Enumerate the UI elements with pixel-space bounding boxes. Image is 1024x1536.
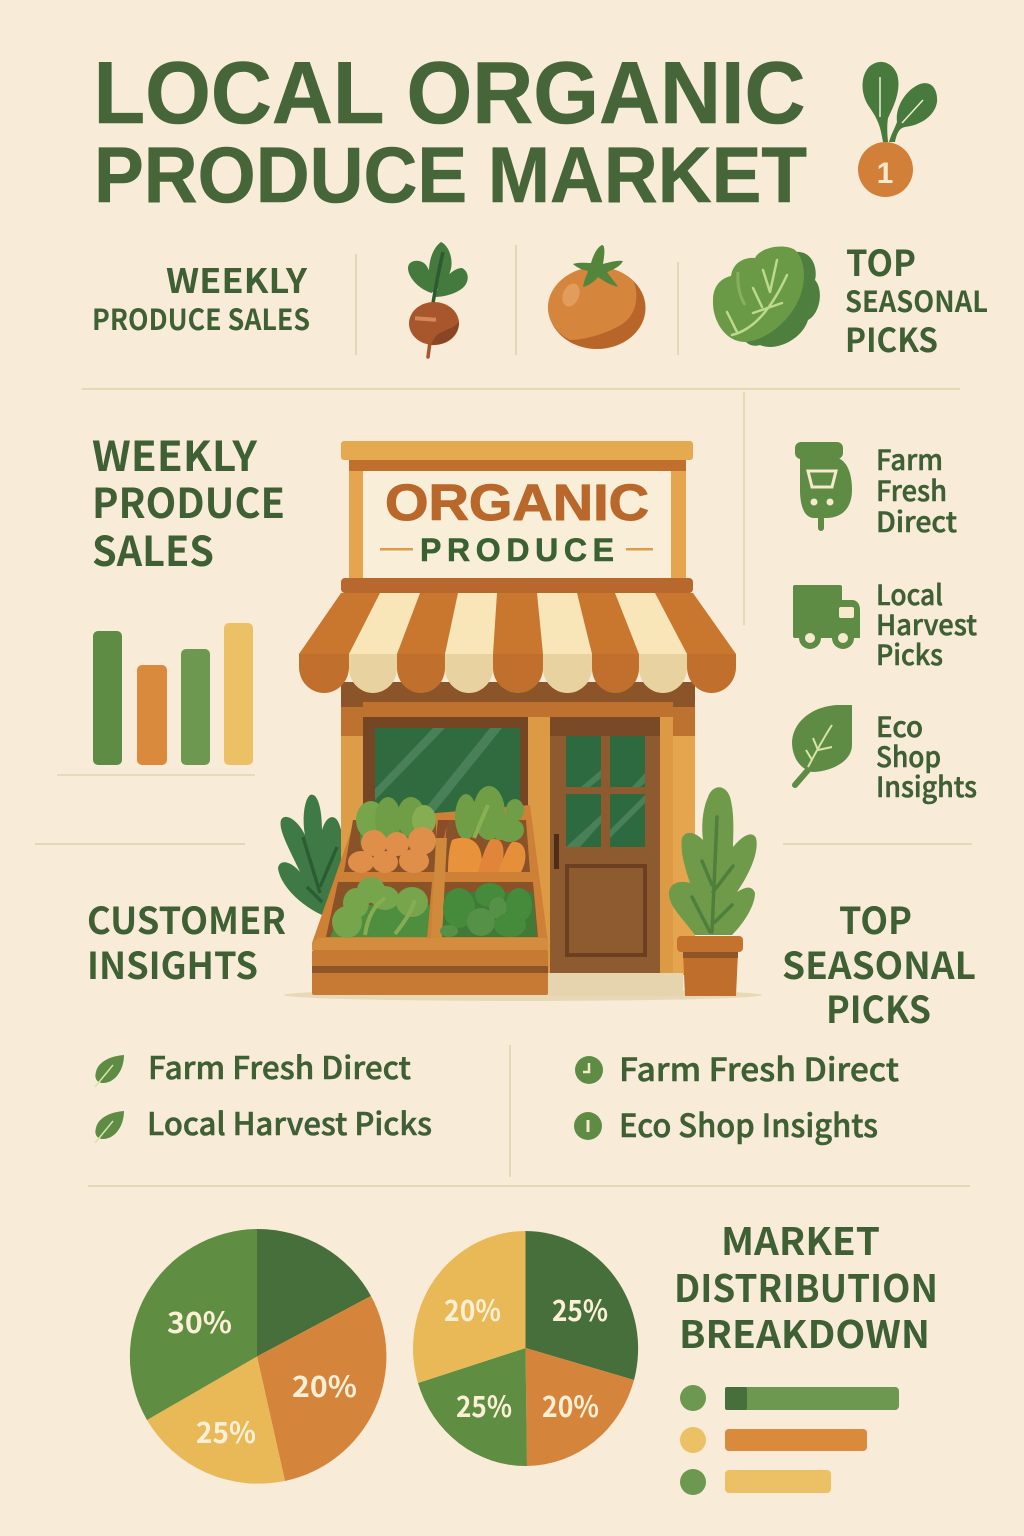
ground shadow [284, 989, 762, 1001]
list: top seasonal picks: Farm Fresh Direct [619, 1045, 899, 1091]
greens top right [455, 786, 524, 842]
floor [548, 973, 683, 996]
heading: weekly produce sales strip [92, 254, 310, 339]
text: eco shop insights: Insights [876, 766, 977, 806]
list: customer insights [95, 1043, 432, 1144]
bar chart: weekly sales [57, 623, 255, 776]
heading: weekly produce sales: WEEKLY [92, 423, 258, 483]
carrots [448, 838, 525, 872]
pie chart: large: 30% [167, 1300, 232, 1342]
heading: top seasonal picks strip: SEASONAL [845, 279, 988, 321]
text: eco shop insights: Eco [876, 706, 923, 746]
spinach bottom right [440, 883, 537, 937]
heading: top seasonal picks: TOP [839, 891, 912, 945]
heading: weekly produce sales strip: WEEKLY [166, 254, 307, 303]
pie chart: large: 25% [196, 1410, 256, 1452]
list: customer insights: Farm Fresh Direct [148, 1043, 411, 1088]
text: farm fresh direct: Direct [876, 501, 957, 541]
heading: weekly produce sales strip: PRODUCE SALES [92, 297, 310, 339]
icon: beet [408, 242, 468, 357]
list: top seasonal picks: Eco Shop Insights [619, 1101, 878, 1147]
lettuce top left [356, 797, 436, 844]
icon: tomato [548, 245, 646, 349]
title [94, 43, 807, 219]
left plant [278, 795, 345, 915]
icon: round bullet [575, 1056, 603, 1084]
heading: market distribution breakdown [674, 1211, 938, 1359]
text: farm fresh direct: Farm [876, 439, 943, 479]
shop sign: PRODUCE [420, 532, 614, 568]
pie chart: small: 25% [552, 1288, 608, 1330]
lettuce bottom left [330, 877, 430, 938]
produce crate [312, 786, 548, 995]
text: eco shop insights [876, 706, 977, 806]
heading: weekly produce sales: PRODUCE [92, 470, 285, 530]
divider and post top [436, 820, 448, 838]
pie chart: small: 20% [542, 1384, 599, 1426]
legend bars [680, 1385, 899, 1495]
potatoes [348, 827, 436, 873]
illustration: storefront [278, 441, 762, 1001]
icon: eco leaf [792, 705, 852, 785]
text: local harvest picks: Harvest [876, 604, 977, 644]
title: PRODUCE MARKET [94, 131, 807, 219]
building [341, 682, 695, 975]
heading: weekly produce sales: SALES [92, 518, 214, 578]
heading: top seasonal picks strip: TOP [846, 235, 916, 287]
awning [299, 578, 736, 693]
icon: farm fresh cart jar [795, 442, 852, 531]
heading: customer insights [87, 891, 286, 990]
heading: market distribution breakdown: BREAKDOWN [679, 1304, 930, 1359]
text: local harvest picks [876, 574, 977, 674]
text: farm fresh direct: Fresh [876, 470, 947, 510]
pie chart: large [130, 1229, 386, 1484]
icon: leaf bullet [95, 1055, 124, 1087]
icon: sprout with number badge: 1 [877, 157, 893, 190]
icon: delivery truck [793, 585, 860, 649]
sign cornice [341, 441, 693, 460]
text: eco shop insights: Shop [876, 736, 941, 776]
icon: sprout with number badge [858, 62, 937, 197]
pie chart: small [413, 1231, 638, 1466]
heading: market distribution breakdown: MARKET [721, 1211, 880, 1266]
heading: top seasonal picks: SEASONAL [782, 936, 976, 990]
title: LOCAL ORGANIC [94, 43, 806, 142]
shop sign [363, 471, 671, 578]
shop sign: ORGANIC [385, 474, 649, 531]
heading: top seasonal picks: PICKS [826, 980, 931, 1034]
heading: top seasonal picks [782, 891, 976, 1034]
right potted plant [669, 787, 757, 996]
heading: weekly produce sales [92, 423, 285, 578]
heading: top seasonal picks strip [845, 235, 988, 362]
list: top seasonal picks [574, 1045, 899, 1147]
text: local harvest picks: Local [876, 574, 943, 614]
heading: top seasonal picks strip: PICKS [845, 314, 938, 362]
pie chart: small: 25% [456, 1384, 512, 1426]
icon: round bullet [574, 1112, 602, 1140]
heading: customer insights: CUSTOMER [87, 891, 286, 945]
text: farm fresh direct [876, 439, 957, 541]
door [550, 717, 660, 973]
icon: lettuce [713, 247, 820, 347]
icon: leaf bullet [95, 1111, 124, 1143]
heading: market distribution breakdown: DISTRIBUTION [674, 1258, 938, 1313]
list: customer insights: Local Harvest Picks [147, 1099, 432, 1144]
pie chart: small: 20% [444, 1288, 501, 1330]
pie chart: large: 20% [292, 1364, 357, 1406]
text: local harvest picks: Picks [876, 634, 943, 674]
heading: customer insights: INSIGHTS [87, 936, 258, 990]
